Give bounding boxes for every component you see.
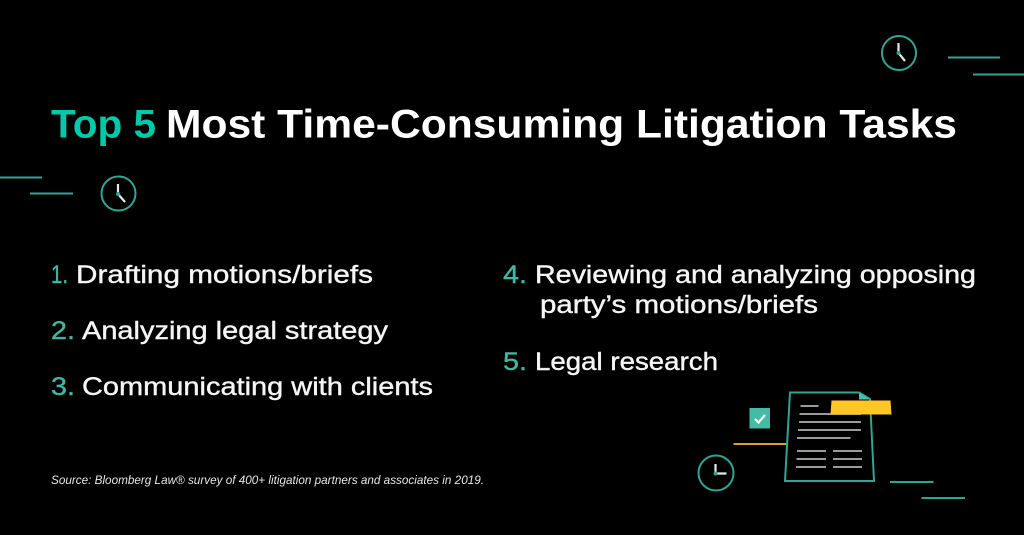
illustration: document with clock and checkbox — [698, 392, 965, 498]
item 2: 2. — [51, 317, 75, 345]
list: left column — [51, 261, 433, 401]
item 1: Drafting motions/briefs — [76, 261, 373, 289]
speed lines — [890, 482, 965, 498]
title: Most Time-Consuming Litigation Tasks — [166, 102, 957, 146]
item 4: 4. — [503, 261, 527, 289]
icon: clock — [698, 456, 734, 490]
icon: checkbox — [750, 408, 770, 428]
item 4: Reviewing and analyzing opposing — [535, 261, 976, 289]
icon: left clock with speed lines — [0, 176, 136, 210]
list: right column — [503, 261, 976, 376]
icon: top right clock with speed lines — [882, 36, 1024, 74]
yellow note — [830, 400, 892, 414]
source note: Source: Bloomberg Law® survey of 400+ litigation partners and associates in 2019. — [51, 473, 484, 487]
yellow connector line — [734, 443, 787, 445]
item 3: 3. — [51, 373, 75, 401]
item 5: 5. — [503, 348, 527, 376]
document — [785, 392, 874, 481]
item 2: Analyzing legal strategy — [82, 317, 389, 345]
item 5: Legal research — [535, 348, 718, 376]
item 3: Communicating with clients — [82, 373, 433, 401]
item 1: 1. — [51, 261, 68, 289]
item 4: party’s motions/briefs — [540, 291, 818, 319]
item 4 — [503, 261, 976, 319]
title: Top 5 — [51, 102, 156, 146]
